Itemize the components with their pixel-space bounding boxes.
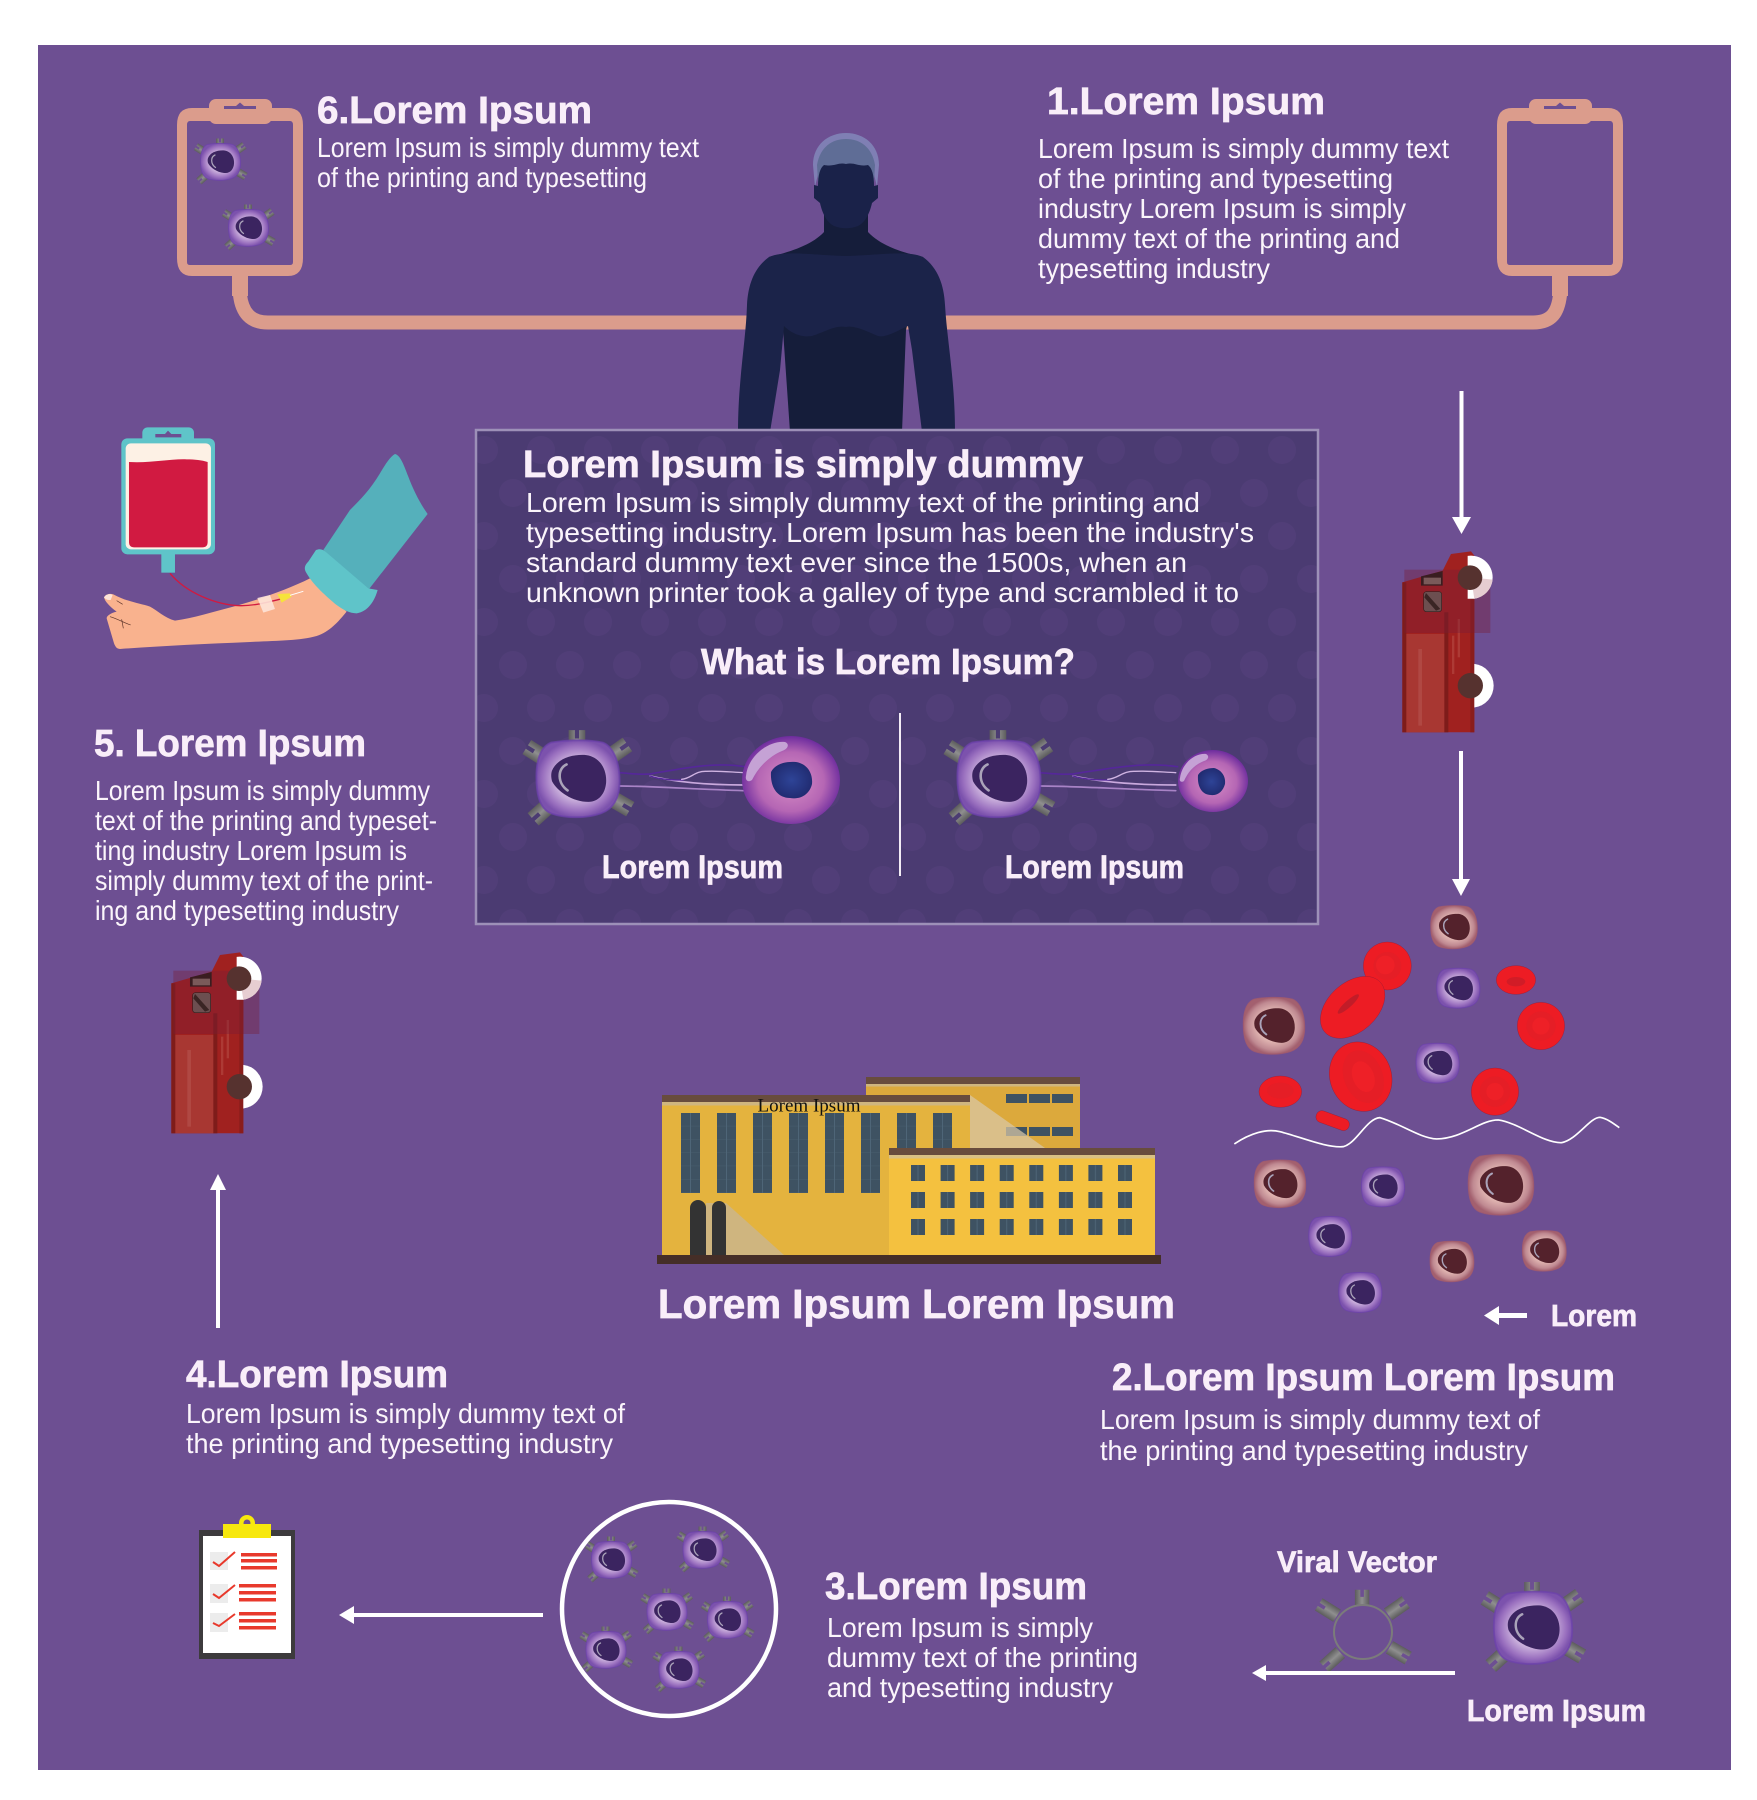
arrow: to viral vector — [1252, 1665, 1455, 1681]
text: panel body: typesetting industry. Lorem Ipsum has been the industry's — [526, 517, 1254, 548]
icon: cell in bag top — [194, 138, 248, 184]
figure: human silhouette — [738, 133, 955, 432]
text: step 5: Lorem Ipsum is simply dummy — [95, 775, 430, 806]
icon: left cell bag — [177, 99, 303, 296]
icon: sleeve — [323, 454, 428, 590]
icon: right truck — [1402, 551, 1494, 732]
text: step 4: Lorem Ipsum is simply dummy text of — [186, 1398, 625, 1429]
arrow: to lorem label — [1484, 1306, 1527, 1325]
label: viral vector: Viral Vector — [1277, 1546, 1437, 1579]
illustration: blood cells — [1234, 906, 1619, 1312]
arrow: up to truck — [210, 1174, 226, 1328]
text: step 3 — [827, 1612, 1138, 1703]
heading: step 2: 2.Lorem Ipsum Lorem Ipsum — [1112, 1357, 1615, 1399]
icon: checklist clipboard — [199, 1515, 295, 1659]
text: step 2: Lorem Ipsum is simply dummy text of — [1100, 1404, 1540, 1435]
text: step 5: text of the printing and typeset- — [95, 805, 437, 836]
arrow: down from tube to truck — [1452, 391, 1471, 534]
illustration: hospital building — [657, 1077, 1161, 1264]
icon: arm — [104, 578, 347, 649]
text: step 3: dummy text of the printing — [827, 1642, 1138, 1673]
heading: step 4: 4.Lorem Ipsum — [186, 1354, 448, 1396]
heading: panel title: Lorem Ipsum is simply dummy — [523, 444, 1083, 486]
arrow: circle to clipboard — [339, 1606, 543, 1624]
panel: central info box — [476, 430, 1318, 924]
heading: step 1: 1.Lorem Ipsum — [1047, 81, 1325, 123]
icon: viral vector — [1315, 1590, 1412, 1672]
text: step 4: the printing and typesetting industry — [186, 1428, 613, 1459]
text: panel body: standard dummy text ever since the 1500s, when an — [526, 547, 1187, 578]
text: step 3: Lorem Ipsum is simply — [827, 1612, 1093, 1643]
label: left diagram: Lorem Ipsum — [602, 849, 783, 885]
heading: step 3: 3.Lorem Ipsum — [825, 1566, 1087, 1608]
text: step 1 — [1038, 133, 1449, 284]
text: step 1: of the printing and typesetting — [1038, 163, 1393, 194]
text: step 6 — [317, 132, 699, 193]
text: step 2 — [1100, 1404, 1540, 1466]
text: step 5: ting industry Lorem Ipsum is — [95, 835, 407, 866]
text: step 6: of the printing and typesetting — [317, 162, 647, 193]
text: step 5: simply dummy text of the print- — [95, 865, 433, 896]
icon: sleeve cuff — [305, 549, 378, 613]
text: step 6: Lorem Ipsum is simply dummy text — [317, 132, 699, 163]
text: step 2: the printing and typesetting industry — [1100, 1435, 1528, 1466]
text: step 1: Lorem Ipsum is simply dummy text — [1038, 133, 1449, 164]
text: step 5: ing and typesetting industry — [95, 895, 399, 926]
label: lorem: Lorem — [1551, 1298, 1637, 1333]
text: step 4 — [186, 1398, 625, 1459]
text: panel body: unknown printer took a galley of type and scrambled it to — [526, 577, 1239, 608]
arrow: down to blood cells — [1452, 751, 1470, 896]
pink cells — [1243, 906, 1566, 1282]
purple cells — [1309, 968, 1480, 1312]
red blood cells — [1259, 942, 1565, 1132]
connecting tube — [240, 295, 1560, 322]
icon: cell in bag bottom — [222, 204, 276, 250]
main wing — [662, 1095, 970, 1255]
diagram: left cell interaction — [522, 730, 840, 826]
heading: building caption: Lorem Ipsum Lorem Ipsum — [658, 1281, 1175, 1327]
text: panel body — [526, 487, 1254, 608]
divider between diagrams — [899, 713, 901, 876]
back wing — [866, 1077, 1080, 1149]
building sign: Lorem Ipsum — [758, 1096, 861, 1116]
icon: engineered cell — [1481, 1582, 1586, 1672]
icon: blood bag — [121, 427, 215, 573]
illustration: circle of cells — [562, 1502, 776, 1716]
text: step 3: and typesetting industry — [827, 1672, 1113, 1703]
icon: left truck — [171, 952, 263, 1133]
diagram: right cell interaction — [943, 730, 1248, 826]
text: step 1: industry Lorem Ipsum is simply — [1038, 193, 1406, 224]
illustration: blood bag and arm — [104, 427, 428, 649]
front wing — [889, 1148, 1155, 1255]
wavy vessel wall — [1234, 1117, 1619, 1147]
text: step 1: dummy text of the printing and — [1038, 223, 1400, 254]
icon: right empty bag — [1497, 99, 1623, 296]
heading: step 6: 6.Lorem Ipsum — [317, 90, 592, 132]
label: right diagram: Lorem Ipsum — [1005, 849, 1184, 885]
text: panel body: Lorem Ipsum is simply dummy text of the printing and — [526, 487, 1200, 518]
heading: step 5: 5. Lorem Ipsum — [94, 723, 366, 765]
heading: panel question: What is Lorem Ipsum? — [701, 641, 1075, 682]
icon: IV line — [104, 573, 303, 628]
label: engineered cell: Lorem Ipsum — [1467, 1693, 1646, 1728]
building base — [657, 1255, 1161, 1264]
text: step 5 — [95, 775, 437, 926]
text: step 1: typesetting industry — [1038, 253, 1270, 284]
